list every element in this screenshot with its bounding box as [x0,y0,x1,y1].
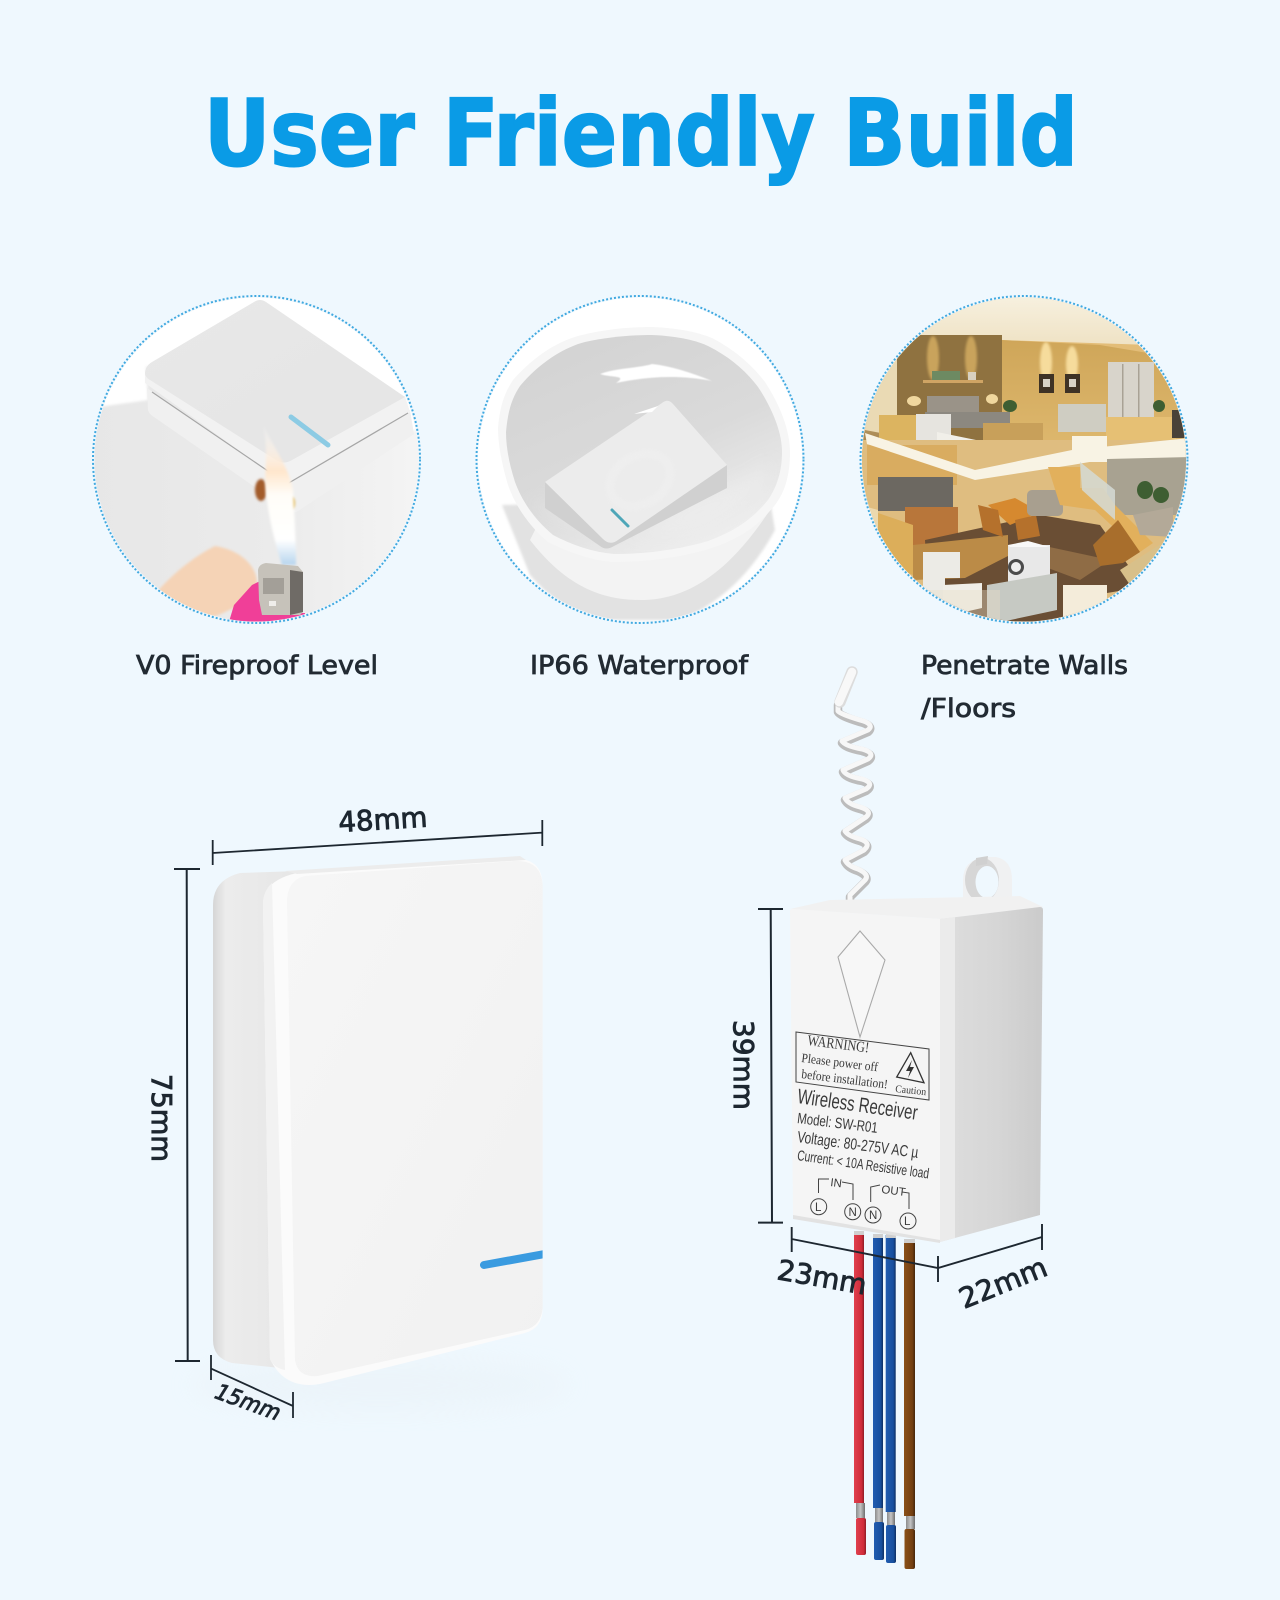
terminal diagram: L [815,1202,822,1214]
dimension: 15mm: 15mm [209,1380,287,1425]
burn mark [255,479,295,509]
label: fireproof: V0 Fireproof Level [136,651,378,681]
dimension: 39mm [727,909,783,1223]
switch under flame [145,300,414,483]
dining set [978,490,1063,540]
flame [263,425,296,565]
terminal diagram: IN [830,1177,843,1190]
label: waterproof: IP66 Waterproof [530,651,749,681]
terminal diagram: N [869,1210,877,1222]
dimension: 75mm [145,869,200,1361]
red wire [854,1232,866,1555]
bed and furniture [879,394,1184,440]
receiver side [940,907,1043,1242]
upper floor walls [897,335,1190,455]
receiver front [790,909,940,1242]
warning box: WARNING! [807,1033,870,1057]
dimension: 23mm and 22mm: 23mm [775,1253,869,1302]
blue wire 2 [886,1235,896,1563]
antenna [838,672,871,908]
panel: fireproof photo [90,290,430,630]
switch face [287,861,543,1376]
bowl [498,327,790,620]
wood floor [925,515,1135,625]
spec text: Wireless Receiver [796,1085,919,1125]
terminal diagram [811,1177,916,1229]
switch back body [213,871,320,1375]
terminal diagram: OUT [881,1184,906,1199]
lower floor walls [860,440,1192,625]
dimension: 48mm: 48mm [337,801,428,839]
water highlights [600,364,712,383]
terminal diagram: N [848,1207,857,1219]
hand [158,545,258,616]
warning box: before installation! [801,1066,889,1092]
lighter [228,563,305,625]
receiver body [790,856,1043,1243]
mounting ring [963,856,1012,903]
dimension: 23mm and 22mm [775,1224,1052,1315]
warning box [796,1032,929,1100]
receiver top face [790,896,1043,919]
dimension: 15mm [209,1355,293,1425]
receiver wires [854,1231,915,1569]
spec text: Current: < 10A Resistive load [796,1148,930,1182]
spec text: Voltage: 80-275V AC µ [796,1129,919,1162]
brown wire [904,1240,915,1569]
switch front plate rim [263,859,543,1385]
ceiling [863,298,1138,440]
spec text: Model: SW-R01 [796,1110,879,1137]
staircase [1048,462,1173,583]
label: penetrate walls: Penetrate Walls [921,651,1128,681]
dimension: 39mm: 39mm [727,1020,760,1110]
label: floors: /Floors [921,694,1016,724]
warning box: Caution [895,1084,927,1098]
spec text [796,1085,930,1182]
dimension: 75mm: 75mm [145,1074,178,1162]
kite logo [838,931,885,1037]
terminal diagram: L [904,1216,911,1228]
title: User Friendly Build [204,80,1078,187]
appliances [920,541,1107,625]
caution triangle icon [897,1053,924,1083]
dimension: 48mm [213,801,542,865]
warning box: Please power off [801,1050,879,1074]
panel: house cutaway photo [860,295,1192,625]
wall switch product [213,832,543,1402]
counter [913,535,1008,580]
floor slab [865,433,1190,480]
LED indicator [484,1254,545,1265]
panel: waterproof photo [470,290,810,630]
dimension: 23mm and 22mm: 22mm [954,1250,1052,1315]
blue wire 1 [873,1235,884,1560]
switch in water [545,401,727,548]
